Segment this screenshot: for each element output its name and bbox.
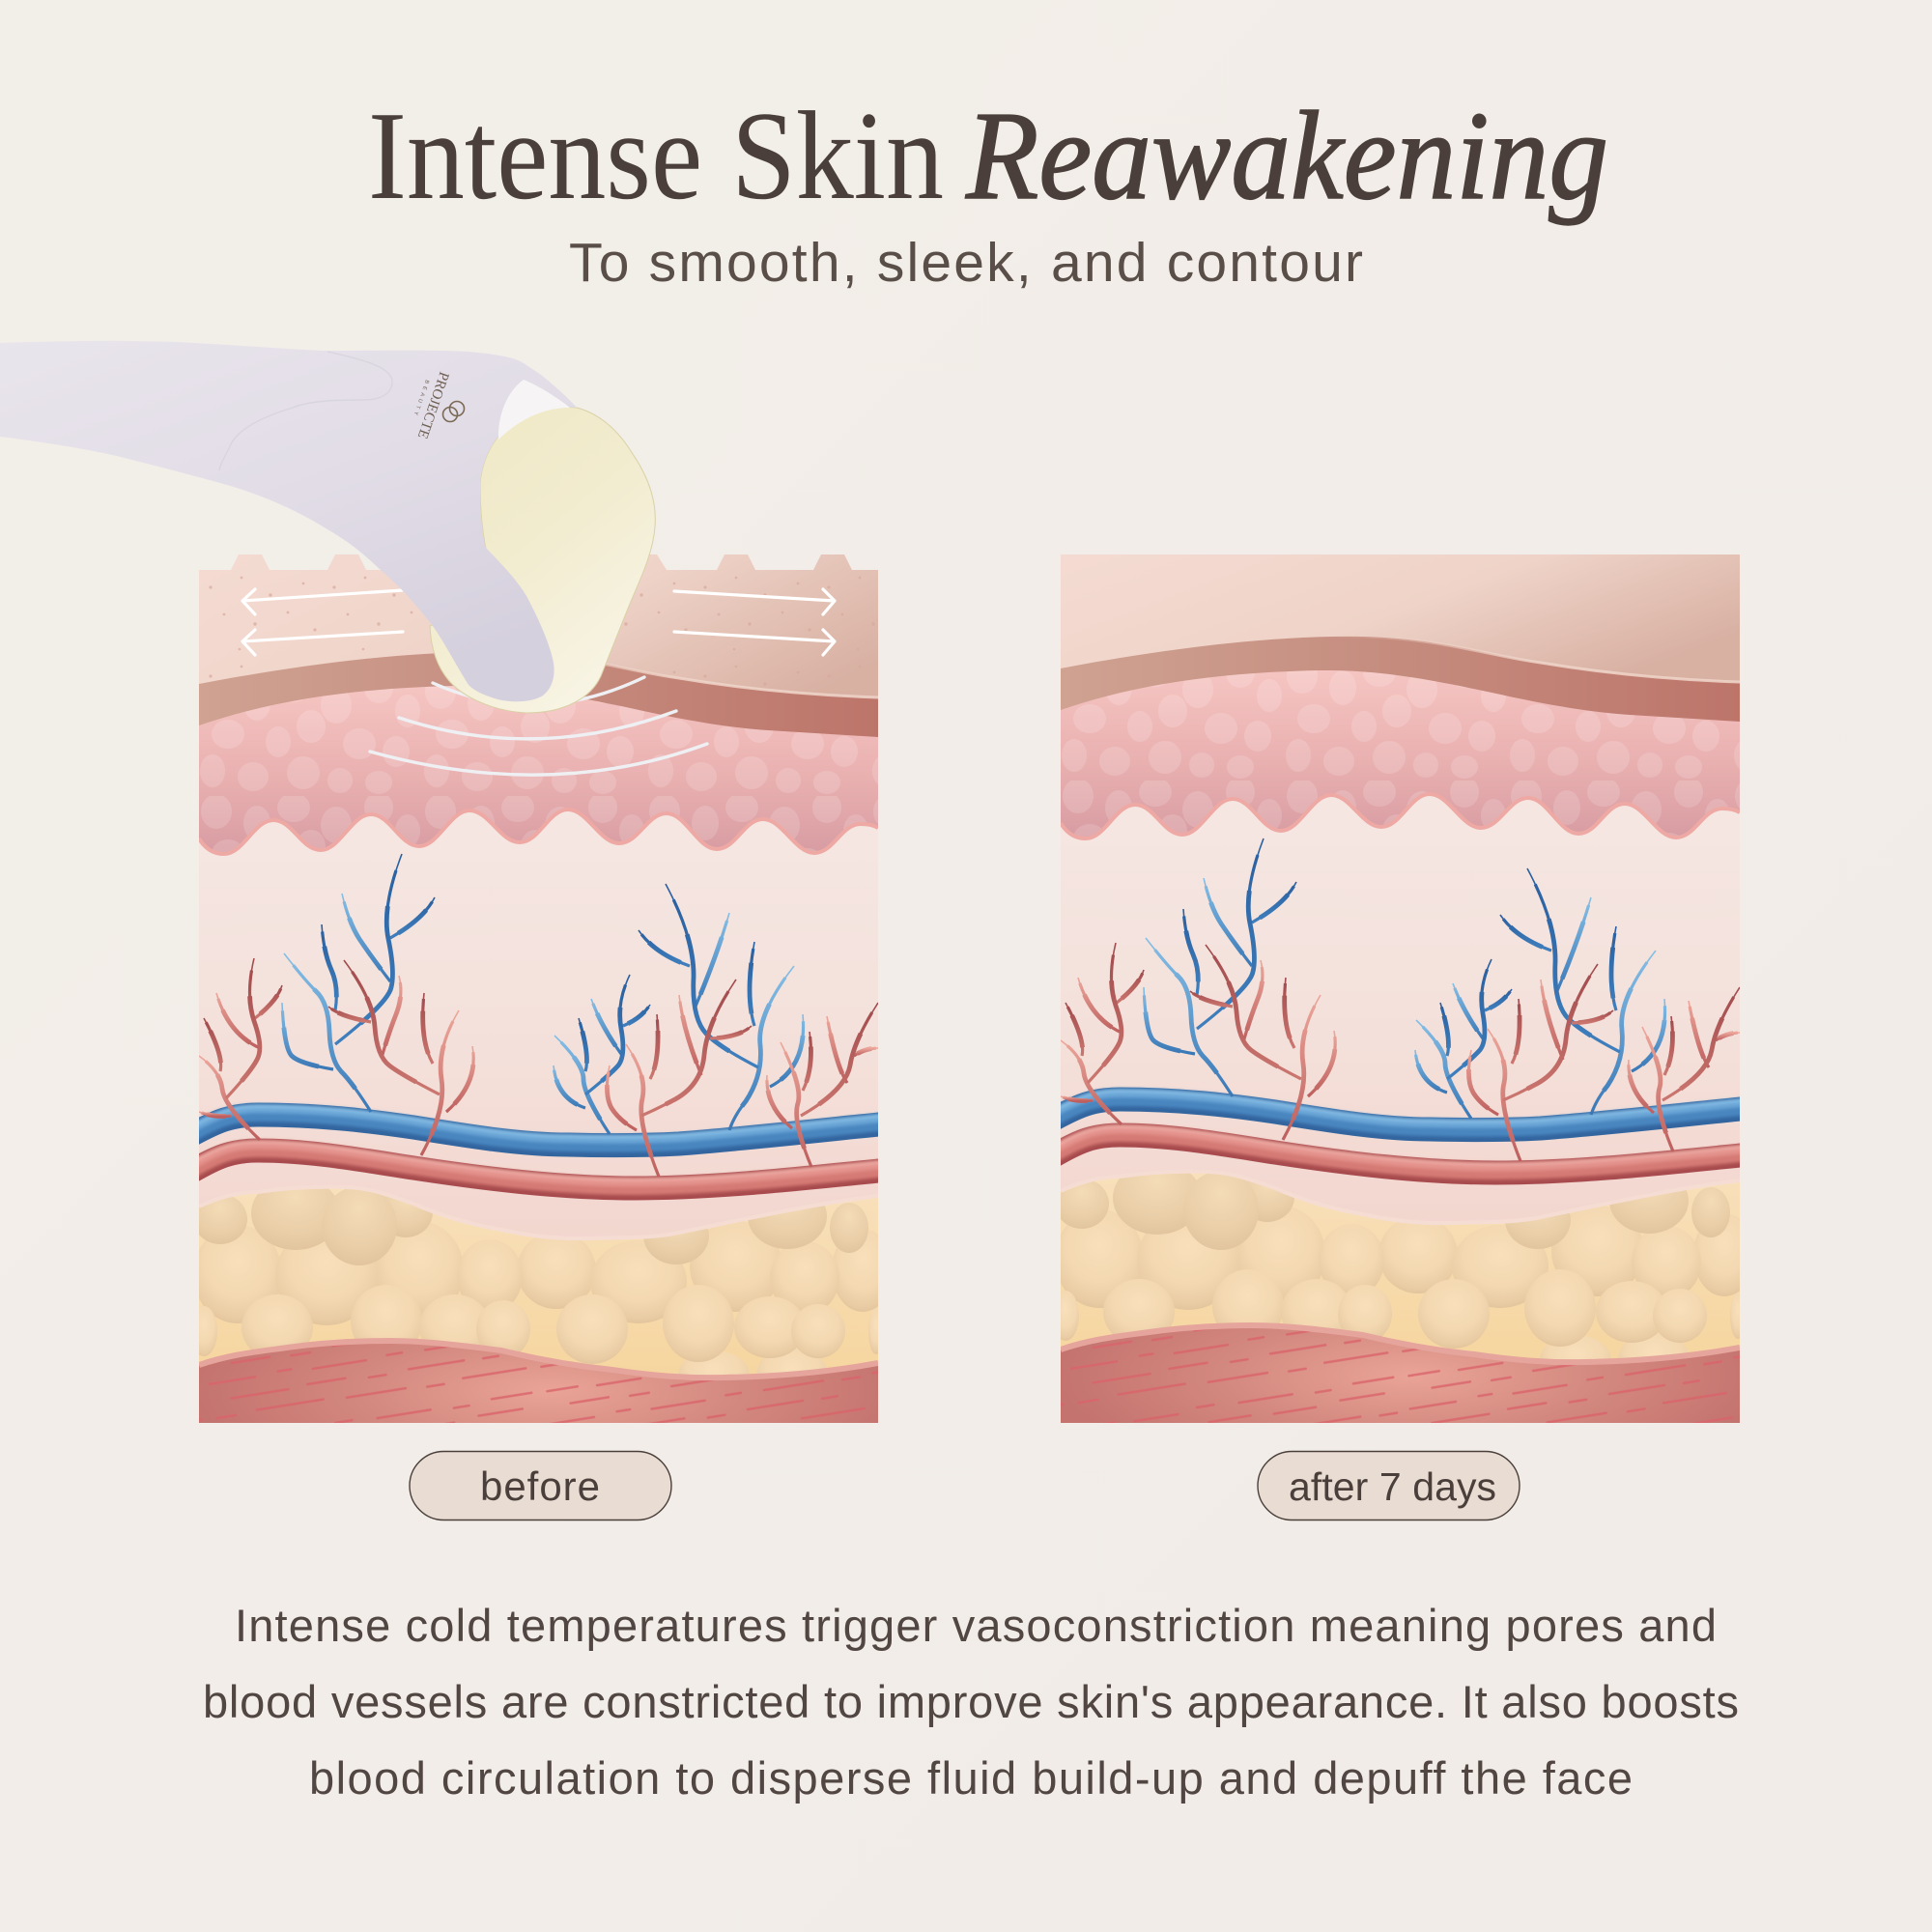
panel: before bbox=[189, 554, 894, 1449]
description text bbox=[203, 1600, 1739, 1804]
pink cell layer bbox=[1061, 670, 1740, 838]
large artery bbox=[189, 1142, 888, 1188]
title: Reawakening bbox=[965, 86, 1608, 226]
fat layer bbox=[1061, 1173, 1740, 1360]
brown skin band bbox=[1061, 636, 1740, 722]
capillaries bbox=[199, 854, 878, 1177]
label: after 7 days bbox=[1258, 1451, 1520, 1520]
fat layer bbox=[190, 1177, 894, 1405]
muscle layer bbox=[1061, 1325, 1740, 1434]
handle seam bbox=[219, 352, 392, 470]
label: after 7 days: after 7 days bbox=[1289, 1464, 1496, 1509]
handle bbox=[0, 341, 577, 701]
muscle layer bbox=[199, 1341, 878, 1449]
capillaries bbox=[1061, 838, 1740, 1161]
description text: blood circulation to disperse fluid build-up and depuff the face bbox=[309, 1752, 1633, 1804]
brown skin band bbox=[199, 652, 878, 753]
brand logo: PROJECTE bbox=[414, 370, 451, 440]
label: before bbox=[410, 1451, 671, 1520]
head cavity bbox=[498, 380, 570, 440]
dermis background bbox=[199, 802, 878, 1265]
dermis background bbox=[1061, 861, 1740, 1221]
ripple arcs bbox=[370, 677, 707, 775]
large vein bbox=[189, 1106, 888, 1146]
pink cell layer bbox=[199, 686, 878, 854]
description text: blood vessels are constricted to improve skin's appearance. It also boosts bbox=[203, 1676, 1739, 1727]
roller device bbox=[0, 341, 655, 713]
title: Intense Skin bbox=[368, 86, 944, 226]
subtitle: To smooth, sleek, and contour bbox=[569, 232, 1363, 294]
smooth epidermis surface bbox=[1061, 554, 1740, 696]
brand logo: BEAUTY bbox=[412, 379, 430, 416]
panel: after 7 days bbox=[1051, 554, 1755, 1434]
description text: Intense cold temperatures trigger vasoconstriction meaning pores and bbox=[235, 1600, 1717, 1651]
epidermis surface layer bbox=[199, 554, 878, 697]
title bbox=[368, 86, 1608, 226]
large vein bbox=[1051, 1091, 1749, 1130]
large artery bbox=[1051, 1126, 1749, 1173]
label: before: before bbox=[480, 1463, 600, 1509]
roller head bbox=[430, 407, 655, 713]
stretch arrows bbox=[242, 589, 835, 655]
